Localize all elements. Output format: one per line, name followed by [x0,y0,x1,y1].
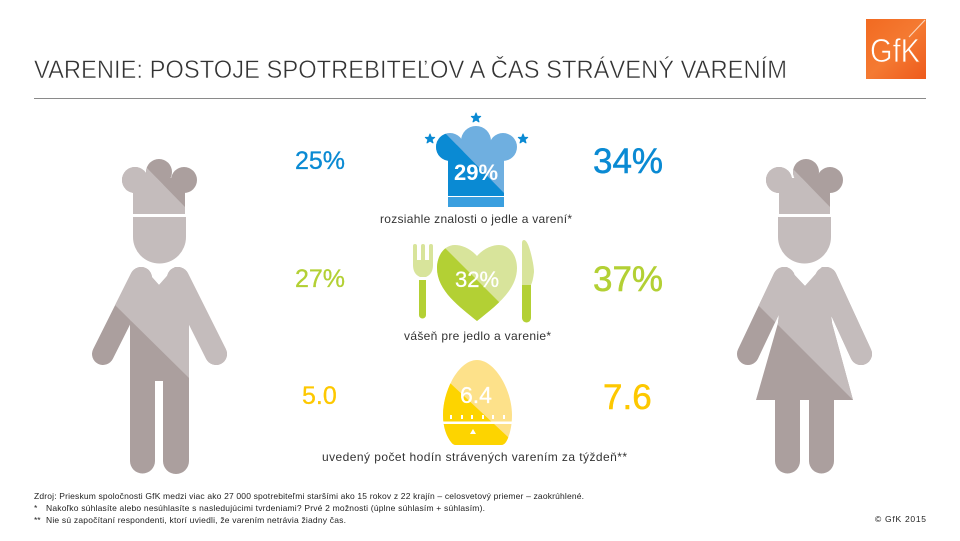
footnotes [34,491,584,525]
footnotes: ** [34,515,41,525]
icon: egg timer [441,360,514,445]
stat: knowledge right: 34% [593,142,663,181]
stat: hours right: 7.6 [603,378,652,417]
value: 32%: 32% [455,267,499,292]
stat: knowledge left: 25% [295,147,345,175]
title: VARENIE: POSTOJE SPOTREBITEĽOV A ČAS STRÁVENÝ VARENÍM [34,55,787,84]
stat: passion left: 27% [295,265,345,293]
figure: male chef [103,159,216,474]
logo: GfK: GfK [870,32,920,69]
footnotes: Nakoľko súhlasíte alebo nesúhlasíte s nasledujúcimi tvrdeniami? Prvé 2 možnosti (úplne súhlasím + súhlasím). [46,503,485,513]
stat: passion right: 37% [593,260,663,299]
copyright: © GfK 2015 [875,514,926,524]
footnotes: Zdroj: Prieskum spoločnosti GfK medzi viac ako 27 000 spotrebiteľmi staršími ako 15 rokov z 22 krajín – celosvetový priemer – zaokrúhlené. [34,491,584,501]
figure: female chef [748,159,861,474]
stat: hours left: 5.0 [302,382,337,410]
logo: GfK [866,19,926,79]
footnotes: Nie sú započítaní respondenti, ktorí uviedli, že varením netrávia žiadny čas. [46,515,346,525]
icon: chef hat with stars [425,113,528,207]
caption: passion: vášeň pre jedlo a varenie* [404,329,551,343]
value: 6.4: 6.4 [460,382,492,408]
caption: knowledge: rozsiahle znalosti o jedle a varení* [380,212,572,226]
caption: hours: uvedený počet hodín strávených varením za týždeň** [322,450,627,464]
footnotes: * [34,503,38,513]
icon: heart with fork and knife [413,240,534,322]
value: 29%: 29% [454,160,498,185]
